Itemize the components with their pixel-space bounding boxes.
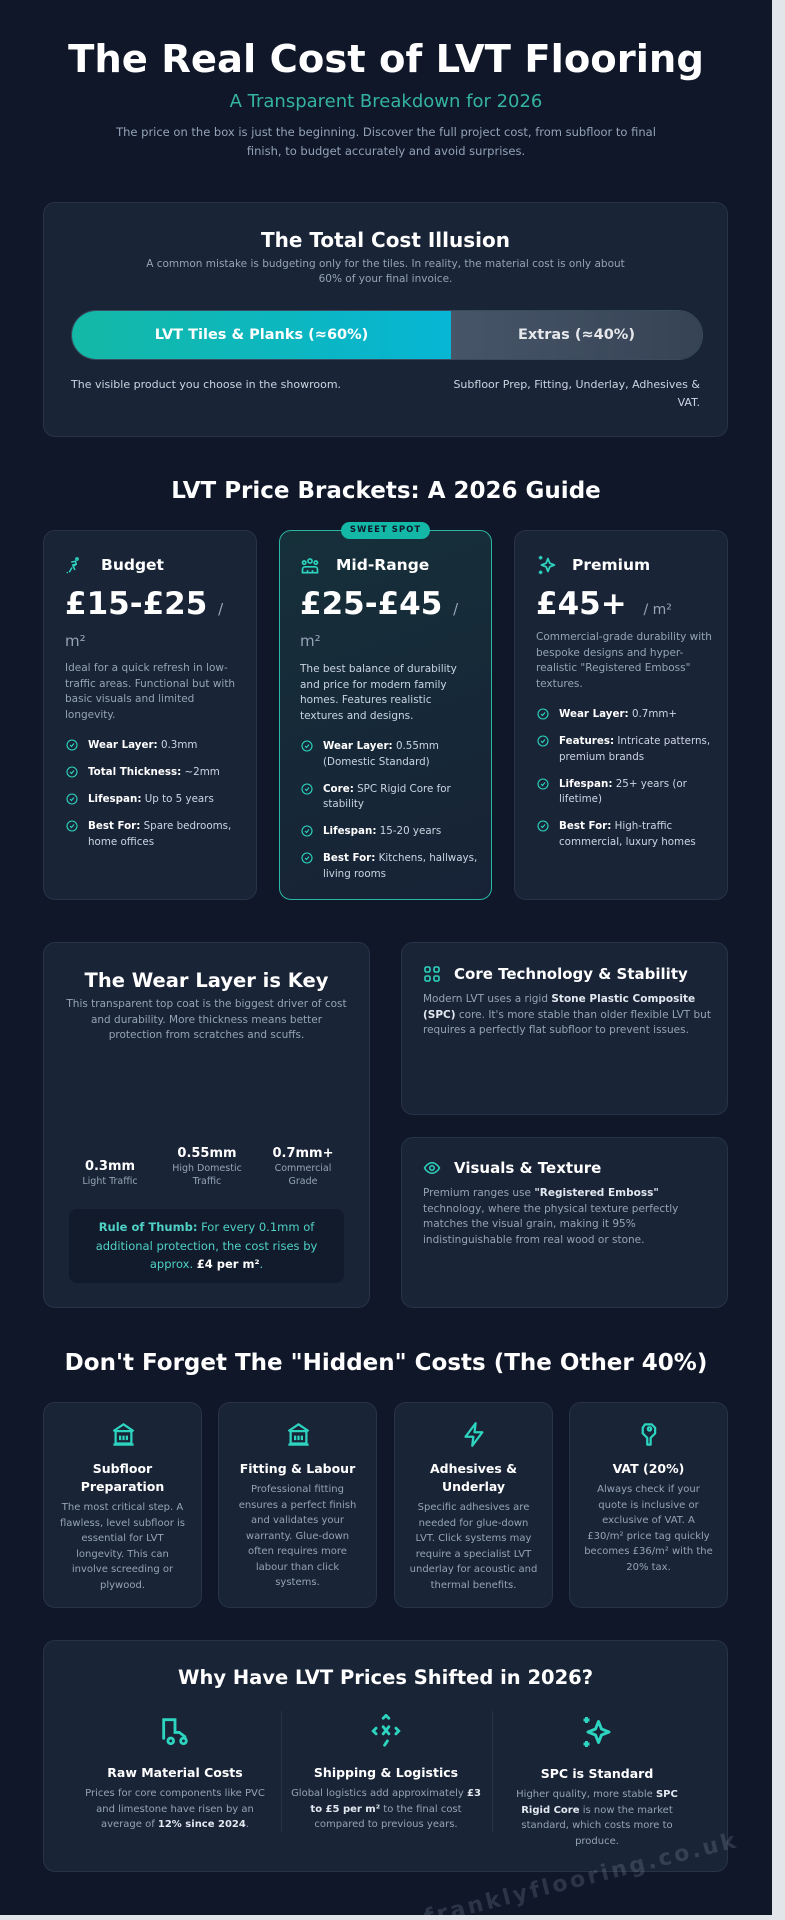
panel: fitting & labour (218, 1402, 377, 1608)
callout: rule of thumb (69, 1209, 344, 1283)
description: Premium ranges use "Registered Emboss" technology, where the physical texture perfectly matches the visual grain, making it 95% indistinguishable from real wood or stone. (423, 1187, 678, 1246)
feature list: Features: Intricate patterns, premium brands (559, 735, 710, 762)
feature list (537, 708, 710, 848)
label 0.55mm (172, 1146, 242, 1187)
column: raw material costs: Prices for core components like PVC and limestone have risen by an average of 12% since 2024. (85, 1788, 265, 1830)
panel heading: The Wear Layer is Key (85, 969, 328, 992)
feature list: Lifespan: 15-20 years (323, 825, 441, 837)
price: £25-£45 / (300, 586, 458, 622)
icon: arrows (371, 1714, 401, 1747)
price: £15-£25 / (65, 586, 223, 622)
icon: building (288, 1423, 310, 1446)
panel: VAT (569, 1402, 728, 1608)
feature list: Wear Layer: 0.55mm (Domestic Standard) (323, 740, 439, 768)
panel: adhesives & underlay (394, 1402, 553, 1608)
card text: Specific adhesives are needed for glue-down LVT. Click systems may require a specialist LVT underlay for acoustic and thermal benefits. (410, 1502, 537, 1590)
feature list (66, 739, 231, 848)
card text: Professional fitting ensures a perfect finish and validates your warranty. Glue-down often requires more labour than click systems. (239, 1484, 356, 1588)
icon: sparkles (538, 556, 556, 574)
subtitle: A Transparent Breakdown for 2026 (230, 91, 542, 112)
badge: sweet spot (341, 522, 430, 539)
description: Ideal for a quick refresh in low-traffic areas. Functional but with basic visuals and limited longevity. (65, 662, 235, 720)
bar segment: tiles (72, 311, 451, 359)
label 0.7mm+ (272, 1146, 334, 1187)
panel: mid-range card (279, 530, 492, 900)
icon: people (302, 558, 318, 574)
panel: core technology (401, 942, 728, 1115)
caption right: Subfloor Prep, Fitting, Underlay, Adhesives & VAT. (453, 378, 700, 409)
feature list: Wear Layer: 0.7mm+ (559, 708, 677, 720)
card text: Always check if your quote is inclusive or exclusive of VAT. A £30/m² price tag quickly becomes £36/m² with the 20% tax. (584, 1484, 713, 1572)
feature list (301, 740, 477, 880)
column: SPC is standard: Higher quality, more stable SPC Rigid Core is now the market standard, which costs more to produce. (516, 1789, 678, 1846)
label 0.3mm (82, 1159, 138, 1187)
feature list: Total Thickness: ~2mm (88, 766, 220, 778)
column: raw material costs (85, 1718, 265, 1830)
panel: budget card: m² (65, 632, 86, 650)
icon: runner (66, 557, 79, 574)
label 0.3mm: Light Traffic (82, 1176, 138, 1187)
column: raw material costs: Raw Material Costs (107, 1765, 243, 1780)
description: Modern LVT uses a rigid Stone Plastic Composite (SPC) core. It's more stable than older flexible LVT but requires a perfectly flat subfloor to prevent issues. (423, 993, 711, 1036)
panel heading: The Total Cost Illusion (261, 228, 510, 252)
section heading: hidden costs: Don't Forget The "Hidden" Costs (The Other 40%) (65, 1350, 707, 1376)
price: £45+ / m² (536, 586, 672, 622)
panel: wear layer (43, 942, 370, 1308)
card text: The most critical step. A flawless, level subfloor is essential for LVT longevity. This can involve screeding or plywood. (60, 1502, 185, 1590)
label 0.55mm: 0.55mm (177, 1146, 237, 1161)
description: The best balance of durability and price for modern family homes. Features realistic textures and designs. (300, 663, 457, 722)
panel: premium card (514, 530, 728, 900)
title: The Real Cost of LVT Flooring (68, 37, 704, 82)
card title: Adhesives & Underlay (430, 1461, 517, 1494)
column: shipping & logistics: Shipping & Logistics (314, 1765, 458, 1780)
label 0.7mm+: 0.7mm+ (272, 1146, 334, 1161)
panel: total cost illusion (43, 202, 728, 437)
bar segment: extras (451, 311, 702, 359)
column: shipping & logistics: Global logistics add approximately £3 to £5 per m² to the final cost compared to previous years. (291, 1788, 481, 1830)
card title: Budget (101, 556, 164, 574)
description: Commercial-grade durability with bespoke designs and hyper-realistic "Registered Emboss" textures. (536, 631, 712, 690)
card title: Fitting & Labour (240, 1461, 355, 1476)
icon: grid (424, 966, 440, 982)
panel: why prices shifted (43, 1640, 728, 1872)
panel description: A common mistake is budgeting only for the tiles. In reality, the material cost is only about 60% of your final invoice. (146, 258, 625, 285)
panel: mid-range card: m² (300, 632, 321, 650)
callout: rule of thumb: Rule of Thumb: For every 0.1mm of additional protection, the cost rises by approx. £4 per m². (96, 1220, 317, 1271)
panel: budget card (43, 530, 257, 900)
feature list: Lifespan: 25+ years (or lifetime) (559, 778, 687, 805)
icon: eye (424, 1162, 440, 1174)
feature list: Best For: Spare bedrooms, home offices (88, 820, 231, 848)
column: SPC is standard: SPC is Standard (541, 1766, 653, 1781)
bar segment: tiles: LVT Tiles & Planks (≈60%) (155, 327, 368, 343)
feature list: Best For: Kitchens, hallways, living rooms (323, 852, 477, 880)
icon: truck (162, 1718, 188, 1746)
icon: tag (642, 1423, 656, 1446)
label 0.7mm+: Commercial Grade (275, 1163, 331, 1187)
panel heading: Visuals & Texture (454, 1159, 601, 1177)
feature list: Wear Layer: 0.3mm (88, 739, 197, 751)
feature list: Best For: High-traffic commercial, luxury homes (559, 820, 696, 848)
caption left: The visible product you choose in the showroom. (71, 378, 341, 391)
description: This transparent top coat is the biggest driver of cost and durability. More thickness means better protection from scratches and scuffs. (66, 998, 347, 1041)
label 0.3mm: 0.3mm (85, 1159, 135, 1174)
card title: Mid-Range (336, 556, 429, 574)
panel: subfloor preparation (43, 1402, 202, 1608)
feature list: Lifespan: Up to 5 years (88, 793, 214, 805)
stacked bar (71, 310, 703, 360)
card title: VAT (20%) (613, 1461, 684, 1476)
column: SPC is standard (516, 1717, 678, 1846)
chart labels (82, 1146, 334, 1187)
icon: building (112, 1423, 134, 1446)
badge: sweet spot: SWEET SPOT (350, 525, 421, 535)
icon: lightning (464, 1422, 484, 1447)
intro text: The price on the box is just the beginning. Discover the full project cost, from subfloor to final finish, to budget accurately and avoid surprises. (116, 125, 656, 158)
panel: visuals & texture (401, 1137, 728, 1308)
card title: Subfloor Preparation (81, 1461, 164, 1494)
feature list: Core: SPC Rigid Core for stability (323, 782, 451, 810)
column: shipping & logistics (291, 1714, 481, 1830)
bar segment: extras: Extras (≈40%) (518, 327, 635, 343)
panel heading: Why Have LVT Prices Shifted in 2026? (178, 1666, 593, 1689)
label 0.55mm: High Domestic Traffic (172, 1163, 242, 1187)
panel heading: Core Technology & Stability (454, 965, 688, 983)
icon: sparkles (584, 1717, 610, 1747)
section heading: price brackets: LVT Price Brackets: A 2026 Guide (171, 478, 601, 504)
card title: Premium (572, 556, 650, 574)
